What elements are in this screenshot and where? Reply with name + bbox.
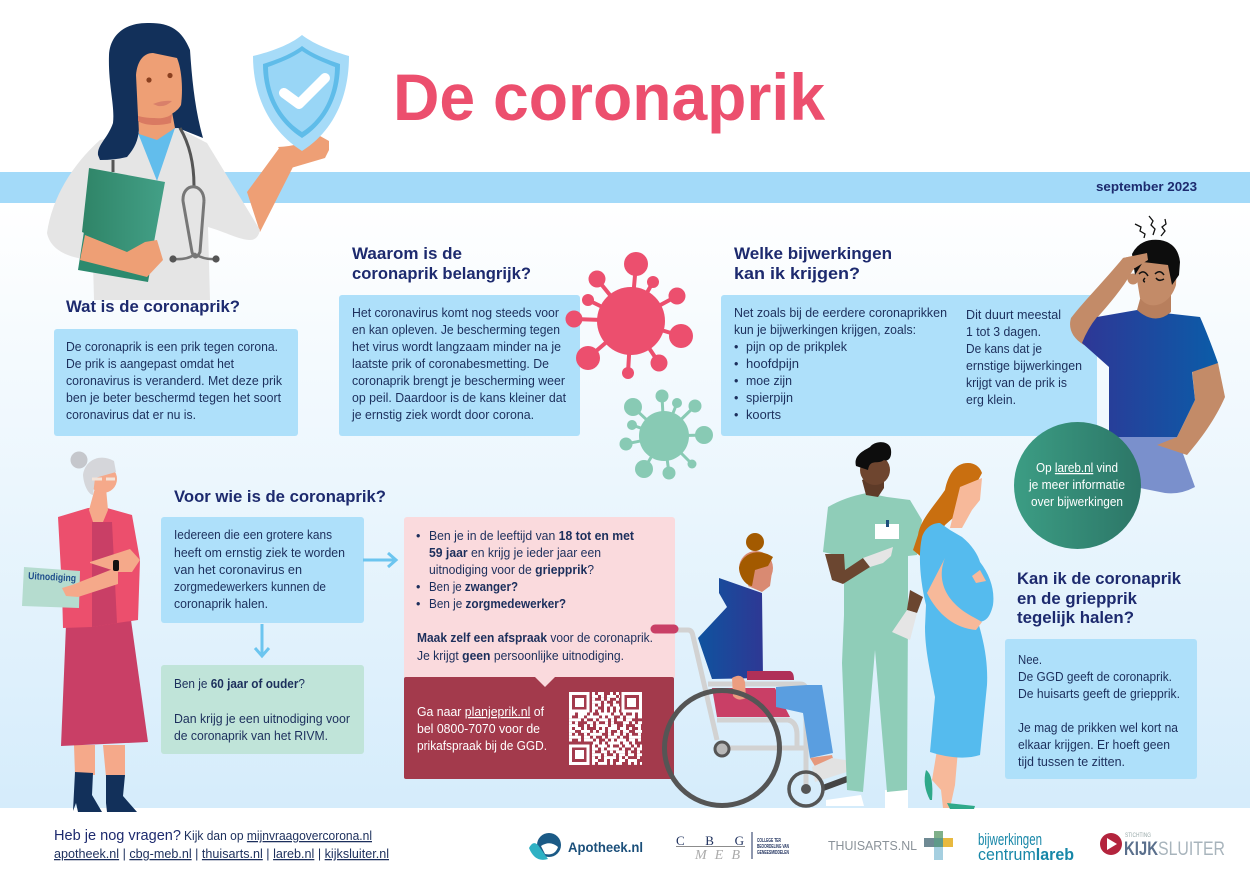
panel: afspraak maken: Ben je zorgmedewerker? xyxy=(429,597,566,611)
logo: Thuisarts.nl: THUISARTS.NL xyxy=(828,838,917,853)
illustration: nurse xyxy=(823,442,923,808)
footer: contact links: Heb je nog vragen? xyxy=(54,827,181,844)
panel: bijwerkingen: De kans dat je xyxy=(966,342,1042,356)
panel: wat is de coronaprik: De coronaprik is een prik tegen corona. xyxy=(66,340,278,354)
panel: afspraak maken: Ben je zwanger? xyxy=(429,580,518,594)
heading: welke bijwerkingen: kan ik krijgen? xyxy=(734,264,860,283)
heading: voor wie: Voor wie is de coronaprik? xyxy=(174,487,386,506)
panel: bijwerkingen: • xyxy=(734,408,738,422)
panel: bijwerkingen: koorts xyxy=(746,408,781,422)
panel: planjeprik: bel 0800-7070 voor de xyxy=(417,722,540,736)
logo: Stichting Kijksluiter xyxy=(1100,833,1225,860)
panel: afspraak maken: • xyxy=(416,597,420,611)
illustration: pregnant woman xyxy=(913,463,993,809)
panel: afspraak maken: 59 jaar en krijg je ieder jaar een xyxy=(429,546,601,560)
panel: planjeprik: Ga naar planjeprik.nl of xyxy=(417,705,544,719)
panel: bijwerkingen: spierpijn xyxy=(746,391,793,405)
panel: voor wie: coronaprik halen. xyxy=(174,597,268,611)
logo: Apotheek.nl xyxy=(529,833,643,860)
illustration: man with headache xyxy=(1070,216,1225,493)
arrow: right xyxy=(363,553,396,567)
panel: bijwerkingen: pijn op de prikplek xyxy=(746,340,848,354)
panel: bijwerkingen: ernstige bijwerkingen xyxy=(966,359,1082,373)
panel: wat is de coronaprik xyxy=(54,329,298,436)
panel: waarom belangrijk: laatste prik of coronabesmetting. De xyxy=(352,357,549,371)
page background xyxy=(0,203,1250,808)
date: september 2023 xyxy=(1096,179,1197,194)
panel: 60 jaar of ouder: Ben je 60 jaar of ouder? xyxy=(174,677,305,691)
panel: waarom belangrijk: je ernstig ziek wordt door corona. xyxy=(351,408,534,422)
panel: waarom belangrijk: op peil. Daardoor is de kans kleiner dat xyxy=(352,391,566,405)
invitation card xyxy=(22,567,80,608)
callout: lareb circle xyxy=(1014,422,1141,549)
heading: welke bijwerkingen: Welke bijwerkingen xyxy=(734,244,892,263)
panel: waarom belangrijk: Het coronavirus komt nog steeds voor xyxy=(352,306,559,320)
illustration: doctor with shield xyxy=(47,23,329,300)
logo: CBG MEB xyxy=(676,832,789,863)
logo: CBG MEB: M E B xyxy=(694,848,740,863)
heading: welke bijwerkingen xyxy=(734,244,892,283)
panel: afspraak maken: Maak zelf een afspraak voor de coronaprik. xyxy=(417,631,653,645)
panel: voor wie: Iedereen die een grotere kans xyxy=(174,528,332,542)
panel: griepprik: De GGD geeft de coronaprik. xyxy=(1018,670,1172,684)
invitation card: Uitnodiging xyxy=(28,571,76,585)
panel: wat is de coronaprik: coronavirus is veranderd. Met deze prik xyxy=(66,374,283,388)
title: De coronaprik xyxy=(393,60,825,134)
panel: afspraak maken xyxy=(404,517,675,679)
panel: afspraak maken: Ben je in de leeftijd van 18 tot en met xyxy=(429,529,635,543)
logo: Stichting Kijksluiter: SLUITER xyxy=(1158,839,1225,860)
callout: lareb circle: over bijwerkingen xyxy=(1031,495,1123,509)
panel: waarom belangrijk: coronaprik brengt je bescherming weer xyxy=(352,374,565,388)
logo: Thuisarts.nl xyxy=(828,831,953,860)
panel: waarom belangrijk xyxy=(339,295,580,436)
panel: 60 jaar of ouder: de coronaprik van het RIVM. xyxy=(174,729,328,743)
panel: griepprik: De huisarts geeft de griepprik. xyxy=(1018,687,1180,701)
logo: CBG MEB: BEOORDELING VAN xyxy=(757,844,789,850)
panel: voor wie xyxy=(161,517,364,623)
panel: 60 jaar of ouder: Dan krijg je een uitnodiging voor xyxy=(174,712,350,726)
heading: waarom belangrijk xyxy=(352,244,531,283)
panel: bijwerkingen xyxy=(721,295,1097,436)
icon: red virus xyxy=(566,252,693,379)
heading: griepprik: Kan ik de coronaprik xyxy=(1017,569,1182,588)
panel: bijwerkingen: krijgt van de prik is xyxy=(966,376,1067,390)
icon: green virus xyxy=(620,390,713,480)
panel: bijwerkingen: • xyxy=(734,374,738,388)
panel: bijwerkingen: moe zijn xyxy=(746,374,792,388)
panel: wat is de coronaprik: coronavirus dat er nu is. xyxy=(66,408,196,422)
panel: griepprik: tijd tussen te zitten. xyxy=(1018,755,1125,769)
logo: Apotheek.nl: Apotheek.nl xyxy=(568,839,643,855)
logo: CBG MEB: COLLEGE TER xyxy=(757,838,781,844)
logo: Stichting Kijksluiter: STICHTING xyxy=(1125,833,1151,839)
panel: voor wie: heeft om ernstig ziek te worden xyxy=(174,546,345,560)
heading: griepprik: en de griepprik xyxy=(1017,589,1138,608)
panel: bijwerkingen: Net zoals bij de eerdere coronaprikken xyxy=(734,306,947,320)
logo: bijwerkingen centrum lareb xyxy=(978,830,1074,864)
panel: wat is de coronaprik: ben je beter beschermd tegen het soort xyxy=(66,391,281,405)
panel: wat is de coronaprik: De prik is aangepast omdat het xyxy=(66,357,234,371)
header band xyxy=(0,172,1250,203)
panel: afspraak maken: • xyxy=(416,580,420,594)
panel: griepprik: elkaar krijgen. Er hoeft geen xyxy=(1018,738,1170,752)
panel: waarom belangrijk: het virus wordt langzaam minder na je xyxy=(352,340,561,354)
panel: afspraak maken: • xyxy=(416,529,420,543)
heading: waarom belangrijk: coronaprik belangrijk? xyxy=(352,264,531,283)
logo: bijwerkingen centrum lareb: bijwerkingen xyxy=(978,830,1042,849)
panel: bijwerkingen: • xyxy=(734,340,738,354)
logo: Stichting Kijksluiter: KIJK xyxy=(1124,839,1158,860)
logo: bijwerkingen centrum lareb: centrumlareb xyxy=(978,845,1074,864)
panel: bijwerkingen: 1 tot 3 dagen. xyxy=(966,325,1041,339)
icon: shield xyxy=(253,35,349,151)
panel: voor wie: van het coronavirus en xyxy=(174,563,302,577)
panel: bijwerkingen: • xyxy=(734,357,738,371)
panel: planjeprik xyxy=(404,677,674,779)
panel: griepprik xyxy=(1005,639,1197,779)
panel: planjeprik: prikafspraak bij de GGD. xyxy=(417,739,547,753)
panel: 60 jaar of ouder xyxy=(161,665,364,754)
panel: bijwerkingen: erg klein. xyxy=(966,393,1016,407)
footer: contact links: apotheek.nl | cbg-meb.nl | thuisarts.nl | lareb.nl | kijksluiter.nl xyxy=(54,847,389,861)
heading: griepprik: tegelijk halen? xyxy=(1017,608,1134,627)
panel: bijwerkingen: Dit duurt meestal xyxy=(966,308,1061,322)
panel: griepprik: Nee. xyxy=(1018,653,1042,667)
callout: lareb circle: je meer informatie xyxy=(1028,478,1125,492)
heading: wat is de coronaprik: Wat is de coronaprik? xyxy=(66,297,240,316)
panel: afspraak maken: Je krijgt geen persoonlijke uitnodiging. xyxy=(417,649,624,663)
panel: waarom belangrijk: en kan opleven. Je bescherming tegen xyxy=(352,323,560,337)
heading: waarom belangrijk: Waarom is de xyxy=(352,244,462,263)
panel: bijwerkingen: kun je bijwerkingen krijgen, zoals: xyxy=(734,323,916,337)
footer: contact links: Kijk dan op mijnvraagovercorona.nl xyxy=(184,829,372,843)
panel: griepprik: Je mag de prikken wel kort na xyxy=(1018,721,1178,735)
panel: afspraak maken: uitnodiging voor de griepprik? xyxy=(429,563,594,577)
panel: bijwerkingen: hoofdpijn xyxy=(746,357,799,371)
panel: voor wie: zorgmedewerkers kunnen de xyxy=(174,580,326,594)
footer: contact links xyxy=(54,827,389,861)
illustration: person in wheelchair xyxy=(655,533,865,806)
panel: bijwerkingen: • xyxy=(734,391,738,405)
illustration: older woman with invitation xyxy=(22,452,148,812)
logo: CBG MEB: C B G xyxy=(676,833,744,848)
logo: CBG MEB: GENEESMIDDELEN xyxy=(757,850,789,856)
heading: griepprik xyxy=(1017,569,1182,627)
arrow: down xyxy=(255,624,269,656)
callout: lareb circle: Op lareb.nl vind xyxy=(1036,461,1118,475)
QR code xyxy=(569,694,642,764)
